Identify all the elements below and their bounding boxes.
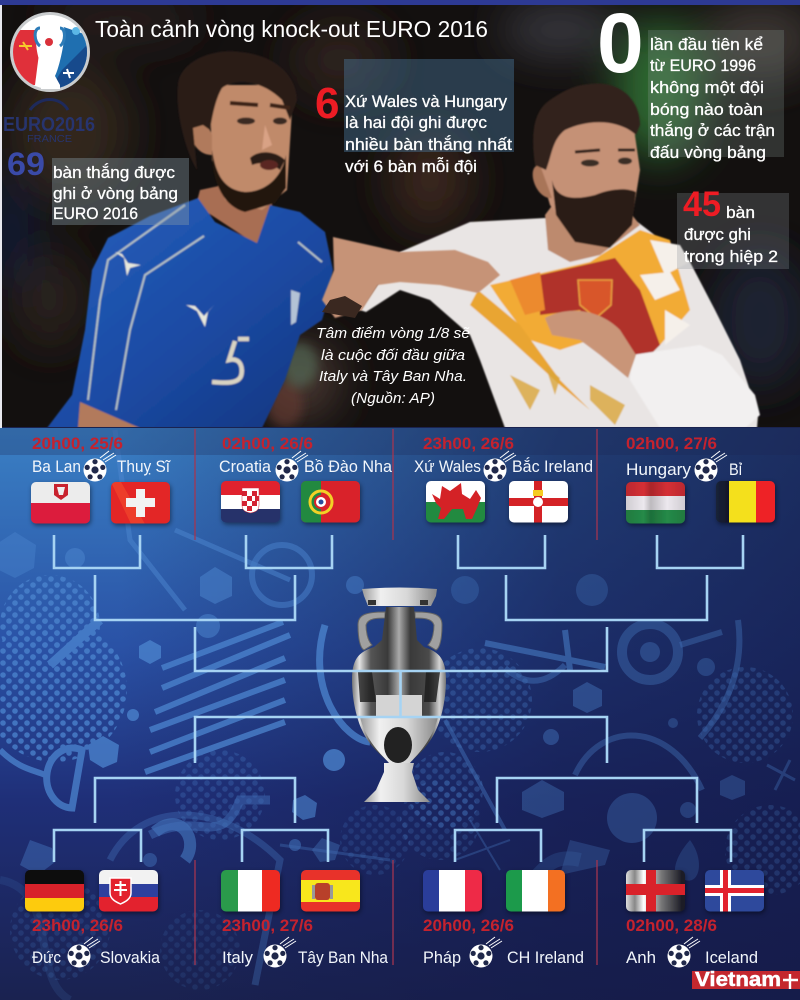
match 7: France vs Ireland [423,870,584,968]
photo caption: Tâm điểm vòng 1/8 sẽ [316,325,470,342]
stat: 45 goals: bàn [726,204,755,222]
Italy crest [291,290,300,325]
head [210,85,292,210]
match 1: Poland vs Switzerland: 20h00, 25/6 [32,434,123,453]
arm and fist of Italy player [322,237,500,318]
match 5: Germany vs Slovakia: Slovakia [100,948,161,967]
match 3: Wales vs Northern Ireland: 23h00, 26/6 [423,434,514,453]
stat: 69 goals: 69 [7,146,45,182]
photo caption: Italy và Tây Ban Nha. [319,368,467,385]
photo caption [316,325,470,407]
match 1: Poland vs Switzerland: Ba Lan [32,457,81,476]
match 8: England vs Iceland: Iceland [705,948,758,967]
decorative background shapes [0,430,800,1000]
icon: UEFA EURO 2016 France wordmark [3,100,95,145]
player: Italy [47,51,333,428]
match 7: France vs Ireland: Pháp [423,948,461,967]
bracket lines [54,535,743,862]
photo caption: (Nguồn: AP) [351,390,435,407]
match 8: England vs Iceland: 02h00, 28/6 [626,916,717,935]
stat: 69 goals: bàn thắng được [53,163,175,182]
stat: 69 goals: EURO 2016 [53,205,138,223]
match 7: France vs Ireland: 20h00, 26/6 [423,916,514,935]
top border strip [0,0,800,5]
stat: 6 goals: Xứ Wales và Hungary [345,93,508,111]
stat: 45 goals: trong hiệp 2 [684,248,778,266]
match 3: Wales vs Northern Ireland [414,434,593,523]
match 4: Hungary vs Belgium: Hungary [626,460,691,479]
stat: 69 goals [7,146,189,225]
orange and red shirt pattern [490,230,690,365]
dividers [195,429,597,965]
match 5: Germany vs Slovakia: 23h00, 26/6 [32,916,123,935]
match 3: Wales vs Northern Ireland: Bắc Ireland [512,457,593,476]
match 8: England vs Iceland [626,870,764,968]
match 2: Croatia vs Portugal: Bồ Đào Nha [304,457,393,476]
photo: two players [0,0,800,428]
player: Spain [360,83,760,428]
match 2: Croatia vs Portugal: Croatia [219,457,272,476]
stat: 6 goals: là hai đội ghi được [345,114,487,132]
icon: UEFA EURO 2016 France wordmark: FRANCE [27,133,72,145]
match 4: Hungary vs Belgium [626,434,775,524]
match 7: France vs Ireland: CH Ireland [507,948,584,967]
match 6: Italy vs Spain: 23h00, 27/6 [222,916,313,935]
trophy [352,588,446,802]
match 2: Croatia vs Portugal: 02h00, 26/6 [222,434,313,453]
shirt number 5 [212,339,249,383]
stat: 45 goals: được ghi [684,226,751,244]
stat: 6 goals: nhiều bàn thắng nhất [345,135,512,154]
stat: 6 goals: với 6 bàn mỗi đội [345,157,477,176]
sleeve [630,345,760,428]
stat: 0 teams: bóng nào toàn [650,101,763,119]
stat: 69 goals: ghi ở vòng bảng [53,185,178,203]
stat: 0 teams: không một đội [650,79,764,97]
title: Toàn cảnh vòng knock-out EURO 2016 [95,16,488,42]
puma logos [115,252,215,327]
match 2: Croatia vs Portugal [219,434,393,523]
match 6: Italy vs Spain [221,870,388,968]
Vietnam+ logo: Vietnam [695,969,781,991]
match 6: Italy vs Spain: Tây Ban Nha [298,948,388,967]
photo left edge [0,5,2,428]
stat: 6 goals: 6 [315,79,339,128]
stat: 45 goals: 45 [683,185,721,224]
neck and head [540,121,641,208]
hand on shirt [545,311,636,378]
stat: 0 teams: lần đầu tiên kể [650,36,763,54]
stat: 45 goals [677,185,789,269]
match 6: Italy vs Spain: Italy [222,948,253,967]
stat: 0 teams: từ EURO 1996 [650,57,756,75]
match 3: Wales vs Northern Ireland: Xứ Wales [414,457,481,476]
stat: 6 goals [315,59,514,176]
match 8: England vs Iceland: Anh [626,948,656,967]
icon: UEFA EURO 2016 France wordmark: EURO2016 [3,114,95,136]
photo caption: là cuộc đối đầu giữa [321,347,465,364]
bracket background [0,428,800,1000]
match 5: Germany vs Slovakia [25,870,161,968]
match 4: Hungary vs Belgium: Bỉ [729,460,742,479]
icon: EURO 2016 trophy logo [10,12,90,92]
match 1: Poland vs Switzerland [31,434,171,524]
blurred green and red flag colours in the crowd [267,343,318,427]
stat: 0 teams: thắng ở các trận [650,121,775,140]
date band [0,428,800,455]
match 4: Hungary vs Belgium: 02h00, 27/6 [626,434,717,453]
match 1: Poland vs Switzerland: Thuỵ Sĩ [117,457,171,476]
stat: 0 teams: đấu vòng bảng [650,144,766,162]
Spain crest [578,280,612,318]
match 5: Germany vs Slovakia: Đức [32,948,61,967]
stat: 0 teams [597,0,784,162]
